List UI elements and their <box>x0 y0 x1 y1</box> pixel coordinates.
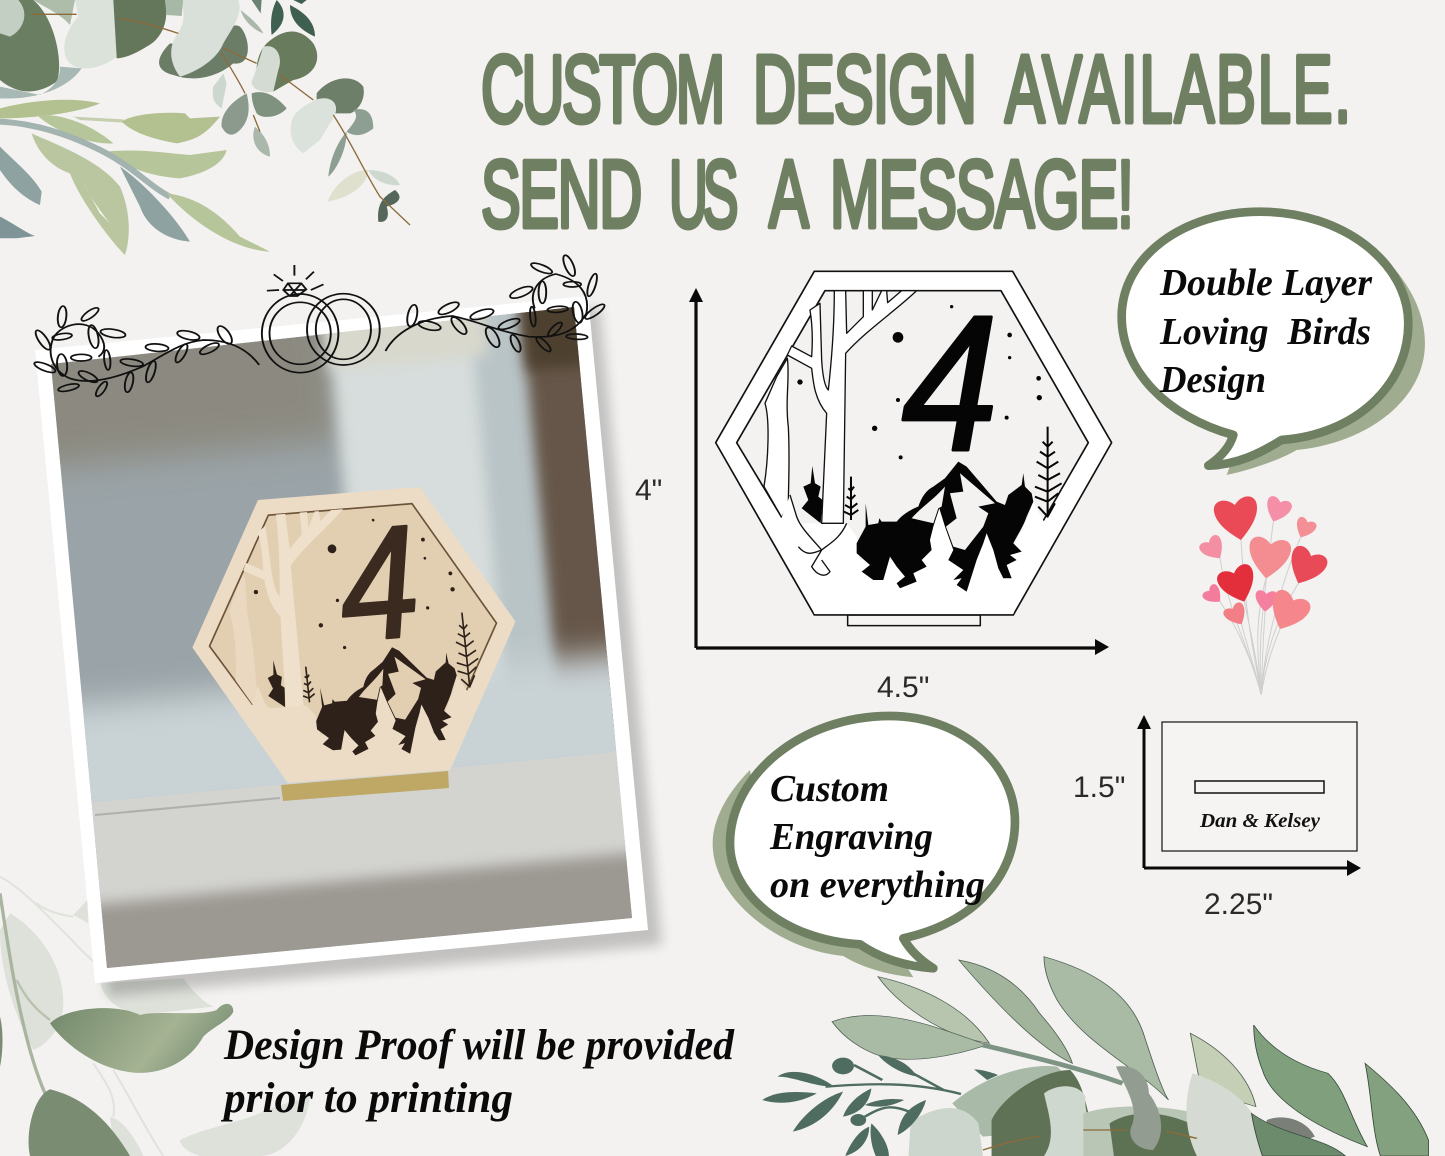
bubble text: Double Layer <box>1159 262 1373 304</box>
stand <box>848 615 980 626</box>
title: SEND <box>481 140 642 247</box>
title: DESIGN <box>753 35 977 142</box>
dimension: 4.5 inch: 4.5" <box>877 671 929 704</box>
line drawing: hexagon table number <box>716 271 1112 626</box>
dimension: 1.5 inch: 1.5" <box>1073 771 1125 804</box>
dimension: 2.25 inch: 2.25" <box>1204 888 1273 921</box>
bubble text: Engraving <box>769 816 933 858</box>
title: US <box>669 142 738 248</box>
bubble text: Design <box>1159 359 1266 401</box>
title: AVAILABLE. <box>1005 35 1351 142</box>
name tag drawing <box>1162 722 1357 851</box>
mountains, pines and stars <box>797 305 1062 592</box>
bubble text: Loving Birds <box>1159 311 1371 353</box>
photo frame with wooden table number <box>35 296 666 1000</box>
title <box>481 35 1351 248</box>
foliage: bottom right leaves <box>762 957 1428 1156</box>
trees <box>764 358 789 517</box>
window outline <box>737 291 1088 521</box>
title: CUSTOM <box>481 35 725 142</box>
axes: main hexagon <box>689 288 1109 655</box>
tag engraving: Dan & Kelsey <box>1199 810 1320 832</box>
note: design proof: prior to printing <box>220 1075 513 1122</box>
wreath and wedding rings <box>33 254 607 398</box>
main tree <box>787 291 917 523</box>
speech bubble: double layer <box>1122 212 1425 475</box>
hexagon frame <box>716 271 1112 615</box>
tree line waves <box>790 495 847 575</box>
ground <box>782 495 1043 614</box>
number 4: 4 <box>902 275 998 491</box>
speech bubble: custom engraving <box>713 716 1015 977</box>
mountain faces <box>912 473 995 550</box>
note: design proof: Design Proof will be provided <box>223 1022 735 1069</box>
icon: heart balloons <box>1197 495 1330 695</box>
window <box>737 291 1088 560</box>
axes: name tag <box>1137 715 1361 876</box>
title: A <box>769 140 809 247</box>
wooden hexagon <box>192 487 516 783</box>
bubble text: on everything <box>770 864 985 906</box>
foliage: top left eucalyptus and olive leaves <box>0 0 410 255</box>
dimension: 4 inch: 4" <box>635 474 662 507</box>
wooden hexagon: 4 <box>330 491 427 675</box>
foliage: bottom left leaves <box>0 877 310 1156</box>
bubble text: Custom <box>770 768 889 810</box>
wooden base <box>281 771 449 801</box>
title: MESSAGE! <box>830 140 1134 247</box>
